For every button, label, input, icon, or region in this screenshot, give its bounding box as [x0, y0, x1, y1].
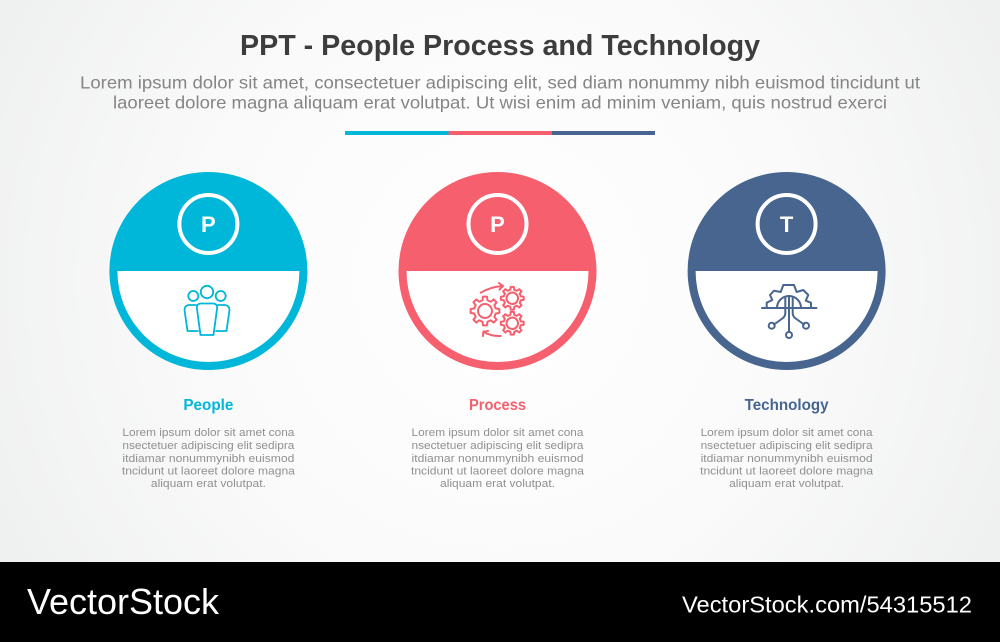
technology description: tncidunt ut laoreet dolore magna	[700, 466, 874, 478]
heading: people: People	[183, 397, 234, 414]
people circle badge: P	[201, 212, 216, 237]
process description: itdiamar nonummynibh euismod	[412, 453, 584, 465]
people circle badge	[109, 172, 307, 370]
process description: tncidunt ut laoreet dolore magna	[411, 466, 585, 478]
heading: process: Process	[469, 397, 526, 414]
technology circle badge	[688, 172, 886, 370]
people description: tncidunt ut laoreet dolore magna	[122, 466, 296, 478]
process description	[411, 427, 585, 490]
panel: technology	[688, 172, 886, 490]
icon: people group	[184, 286, 230, 335]
footer image id: VectorStock.com/54315512	[682, 592, 972, 618]
people description	[122, 427, 296, 490]
tricolour divider bar	[345, 131, 655, 135]
technology description: nsectetuer adipiscing elit sedipra	[701, 440, 874, 452]
subtitle text block: Lorem ipsum dolor sit amet, consectetuer adipiscing elit, sed diam nonummy nibh euismod tincidunt ut	[80, 72, 920, 92]
process description: aliquam erat volutpat.	[440, 478, 555, 490]
people description: itdiamar nonummynibh euismod	[122, 453, 294, 465]
people description: Lorem ipsum dolor sit amet cona	[122, 427, 295, 439]
subtitle text block: laoreet dolore magna aliquam erat volutpat. Ut wisi enim ad minim veniam, quis nostrud exerci	[113, 92, 887, 112]
panel: people	[109, 172, 307, 490]
technology description: aliquam erat volutpat.	[729, 478, 844, 490]
technology circle badge: T	[780, 212, 794, 237]
footer logo: VectorStock	[27, 581, 220, 622]
process description: Lorem ipsum dolor sit amet cona	[412, 427, 584, 439]
panel: process	[398, 172, 596, 490]
technology description: itdiamar nonummynibh euismod	[701, 453, 873, 465]
subtitle text block	[80, 72, 920, 112]
footer band	[0, 562, 1000, 642]
people description: aliquam erat volutpat.	[151, 478, 266, 490]
title: PPT - People Process and Technology	[240, 30, 760, 62]
process description: nsectetuer adipiscing elit sedipra	[412, 440, 584, 452]
heading: technology: Technology	[745, 397, 829, 414]
process circle badge: P	[490, 212, 505, 237]
people description: nsectetuer adipiscing elit sedipra	[122, 440, 295, 452]
icon: gears with arrows	[471, 283, 524, 336]
icon: gear with circuit	[762, 285, 816, 338]
technology description	[700, 427, 874, 490]
process circle badge	[398, 172, 596, 370]
technology description: Lorem ipsum dolor sit amet cona	[701, 427, 874, 439]
